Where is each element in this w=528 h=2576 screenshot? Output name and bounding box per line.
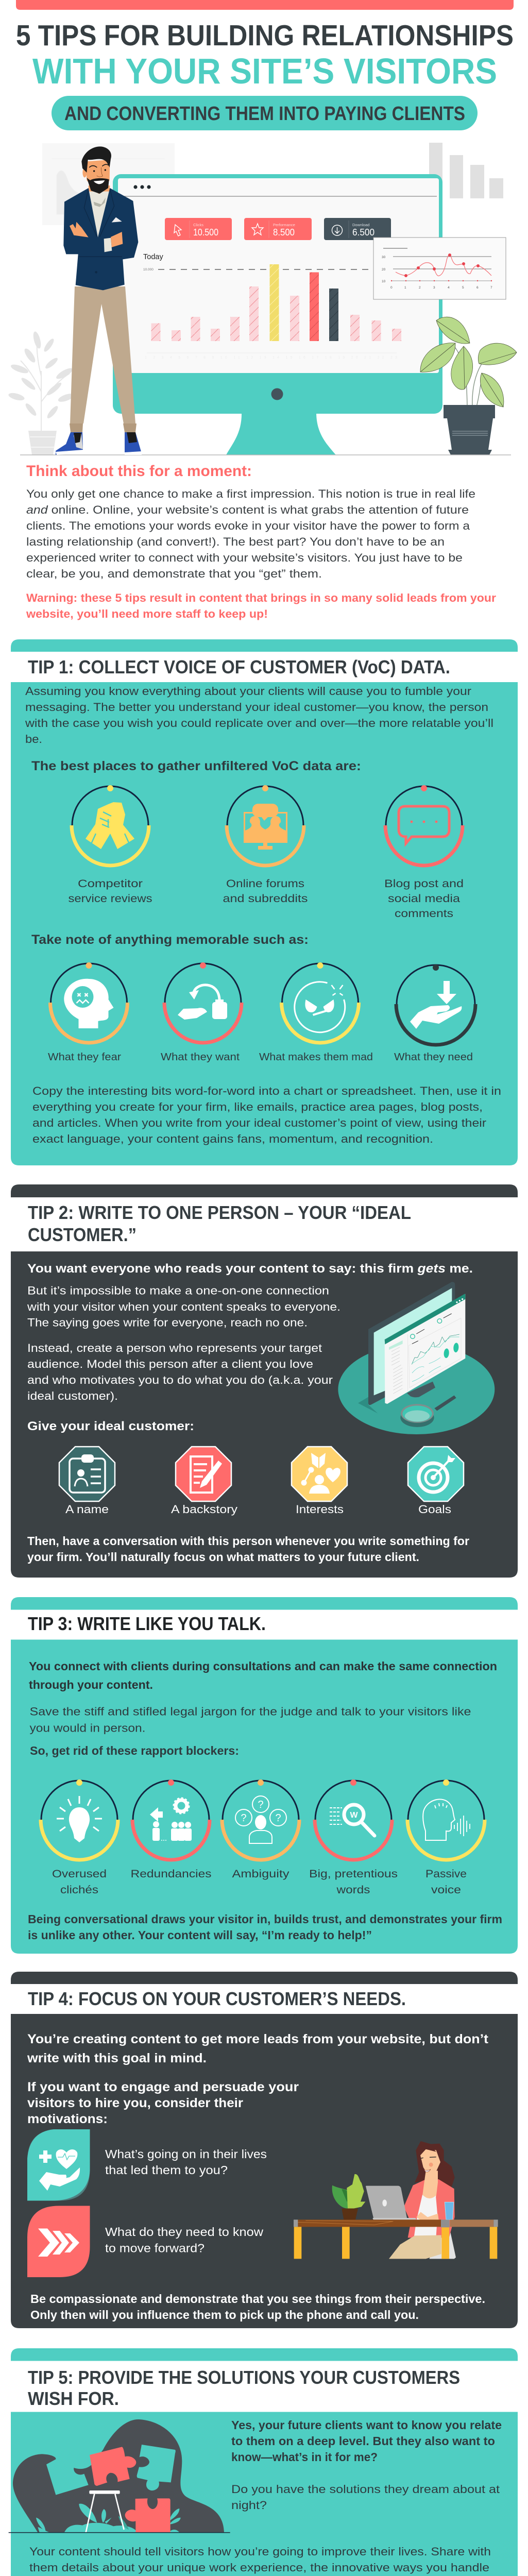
title line 2: WITH YOUR SITE’S VISITORS bbox=[32, 51, 497, 91]
subheading: give your ideal customer: Give your ideal customer: bbox=[27, 1419, 194, 1433]
panel: tip 4 bbox=[11, 1972, 518, 2328]
dark blob bbox=[13, 2419, 224, 2532]
intro paragraph: and online. Online, your website’s content is what grabs the attention of future bbox=[26, 503, 469, 516]
tip 3 top band bbox=[11, 1597, 518, 1609]
tip 2 closing: Then, have a conversation with this person whenever you write something for bbox=[27, 1534, 469, 1548]
tip 5 lead bbox=[231, 2418, 502, 2464]
line chart card: 20 bbox=[382, 268, 386, 272]
tip 4 closing bbox=[30, 2292, 485, 2321]
line chart card: 10 bbox=[382, 280, 386, 283]
icon: big pretentious words bbox=[315, 1780, 392, 1860]
tip 1 closing text: and articles. When you write from your ideal customer’s point of view, using their bbox=[32, 1116, 486, 1129]
tip 3 closing bbox=[28, 1912, 502, 1942]
laptop bbox=[366, 2186, 407, 2218]
icon: online forums bbox=[227, 785, 304, 866]
stat card: performance: Performance bbox=[273, 223, 295, 227]
tip 5 lead: Yes, your future clients want to know you relate bbox=[231, 2418, 502, 2432]
line chart card: 2 bbox=[419, 286, 421, 290]
panel: tip 3 bbox=[11, 1597, 518, 1954]
line chart card: 30 bbox=[382, 256, 386, 259]
tip 5 paragraph: them details about your unique work experience, the innovative ways you handle bbox=[29, 2561, 489, 2574]
tip 1 heading: TIP 1: COLLECT VOICE OF CUSTOMER (VoC) DATA. bbox=[28, 656, 450, 677]
tip 1 closing text: Copy the interesting bits word-for-word into a chart or spreadsheet. Then, use it in bbox=[32, 1084, 501, 1097]
tip 5 lead: to them on a deep level. But they also want to bbox=[231, 2434, 495, 2448]
desk bbox=[298, 2219, 441, 2227]
labels: rapport blockers: clichés bbox=[60, 1884, 98, 1896]
tip 5 lead: know—what’s in it for me? bbox=[231, 2450, 378, 2464]
tip 2 closing: your firm. You’ll naturally focus on what matters to your future client. bbox=[27, 1550, 419, 1564]
tip 2 lead: You want everyone who reads your content to say: this firm gets me. bbox=[27, 1262, 473, 1276]
stat card: performance bbox=[244, 218, 312, 240]
tip 1 intro text: be. bbox=[25, 733, 42, 745]
subtitle pill: AND CONVERTING THEM INTO PAYING CLIENTS bbox=[64, 103, 465, 125]
warning: Warning: these 5 tips result in content that brings in so many solid leads from your bbox=[26, 591, 496, 604]
line chart card: 3 bbox=[433, 286, 435, 290]
neck bbox=[89, 185, 110, 208]
line chart card: 0 bbox=[390, 286, 393, 290]
line chart card: 4 bbox=[448, 286, 450, 290]
puzzle illustration bbox=[9, 2419, 230, 2533]
icon: what they want bbox=[164, 962, 242, 1043]
labels: places: and subreddits bbox=[223, 893, 308, 905]
stat card: performance: 8.500 bbox=[273, 227, 295, 238]
tip 2 paragraph two: audience. Model this person after a client you love bbox=[27, 1358, 313, 1370]
bar chart: today bbox=[143, 253, 401, 360]
ground line bbox=[20, 454, 511, 455]
badge: goals bbox=[408, 1447, 464, 1501]
tip 1 panel background bbox=[11, 682, 518, 1165]
tip 3 paragraph: you would in person. bbox=[30, 1722, 145, 1734]
gray plant bbox=[8, 331, 75, 455]
tip 5 question: night? bbox=[231, 2499, 267, 2512]
labels: rapport blockers: Passive bbox=[425, 1868, 467, 1880]
tip 1 intro text: with the case you wish you could replicate over and over—the more relatable you’ll bbox=[25, 717, 493, 730]
panel: tip 1 bbox=[11, 639, 518, 1165]
tip 4 sub-lead bbox=[27, 2080, 299, 2126]
tip 5 heading: WISH FOR. bbox=[28, 2388, 119, 2409]
badge: interests bbox=[292, 1447, 347, 1501]
tip 1 intro text bbox=[25, 685, 493, 745]
tip 4 heading: TIP 4: FOCUS ON YOUR CUSTOMER’S NEEDS. bbox=[28, 1988, 406, 2009]
background bars bbox=[429, 143, 503, 198]
tip 2 paragraph one bbox=[27, 1284, 340, 1329]
labels: rapport blockers: words bbox=[336, 1884, 370, 1896]
warning: website, you’ll need more staff to keep up! bbox=[26, 607, 268, 620]
tip 2 paragraph one: But it’s impossible to make a one-on-one connection bbox=[27, 1284, 329, 1297]
line chart card: 1 bbox=[404, 286, 406, 290]
icon: helping hand leaf bbox=[27, 2129, 90, 2201]
labels: memorable: What they fear bbox=[48, 1052, 121, 1063]
hands bbox=[416, 2212, 439, 2221]
icon: ambiguity bbox=[222, 1780, 299, 1860]
beard bbox=[87, 178, 109, 194]
text: what's going on: What’s going on in their lives bbox=[105, 2147, 267, 2161]
tip 5 heading bbox=[28, 2367, 460, 2409]
labels: rapport blockers: Big, pretentious bbox=[309, 1868, 398, 1880]
labels: memorable: What they want bbox=[161, 1052, 240, 1063]
tip 4 sub-lead: motivations: bbox=[27, 2112, 108, 2126]
potted plant bbox=[332, 2185, 349, 2209]
ground line bbox=[9, 2531, 230, 2534]
tip 4 lead: write with this goal in mind. bbox=[27, 2051, 207, 2065]
subheading: rapport blockers: So, get rid of these rapport blockers: bbox=[30, 1744, 239, 1757]
red puzzle piece bottom bbox=[125, 2498, 171, 2532]
stat card: download: Download bbox=[352, 223, 369, 227]
face bbox=[420, 2149, 440, 2174]
stat card: download bbox=[324, 218, 391, 240]
foliage bbox=[36, 2504, 181, 2532]
tip 3 closing: is unlike any other. Your content will say, “I’m ready to help!” bbox=[28, 1928, 372, 1942]
labels: rapport blockers bbox=[52, 1868, 467, 1896]
teal puzzle piece bbox=[137, 2445, 176, 2490]
tip 2 closing bbox=[27, 1534, 469, 1564]
icon: blog comments bbox=[385, 785, 463, 866]
monitor stand bbox=[226, 412, 336, 455]
labels: places bbox=[68, 878, 464, 920]
icon: big pretentious words: W bbox=[350, 1811, 358, 1820]
tip 1 intro text: Assuming you know everything about your clients will cause you to fumble your bbox=[25, 685, 471, 698]
tip 1 closing text: everything you create for your firm, like emails, practice area pages, blog posts, bbox=[32, 1100, 483, 1113]
tip 5 question: Do you have the solutions they dream about at bbox=[231, 2483, 500, 2496]
stat card: download: 6.500 bbox=[352, 227, 374, 238]
labels: memorable bbox=[48, 1052, 473, 1063]
subtitle pill bbox=[52, 96, 478, 130]
icon: competitor service reviews bbox=[72, 785, 149, 866]
tip 2 paragraph one: with your visitor when your content speaks to everyone. bbox=[27, 1300, 340, 1313]
text: what's going on bbox=[105, 2147, 267, 2177]
tip 2 heading: TIP 2: WRITE TO ONE PERSON – YOUR “IDEAL bbox=[28, 1202, 411, 1223]
badge: a name bbox=[59, 1447, 115, 1501]
badge labels: A backstory bbox=[171, 1503, 237, 1516]
hero illustration bbox=[8, 143, 517, 455]
labels: places: Competitor bbox=[78, 878, 143, 890]
tip 5 paragraph: Your content should tell visitors how you’re going to improve their lives. Share with bbox=[29, 2545, 491, 2558]
icon: what makes them mad bbox=[281, 962, 359, 1043]
tip 2 paragraph two bbox=[27, 1342, 333, 1402]
title bbox=[16, 19, 514, 91]
tip 1 closing text bbox=[32, 1084, 501, 1145]
tip 4 closing: Only then will you influence them to pick up the phone and call you. bbox=[30, 2308, 419, 2321]
subheading: take note: Take note of anything memorable such as: bbox=[31, 933, 309, 947]
labels: places: service reviews bbox=[68, 893, 152, 905]
icon: forward chevrons leaf bbox=[27, 2206, 90, 2277]
tip 4 sub-lead: If you want to engage and persuade your bbox=[27, 2080, 299, 2094]
labels: rapport blockers: Ambiguity bbox=[232, 1868, 289, 1880]
panel: tip 5 bbox=[9, 2348, 518, 2576]
tip 2 heading: CUSTOMER.” bbox=[28, 1224, 137, 1245]
icon: what they fear bbox=[50, 962, 128, 1043]
icon: overused cliches bbox=[41, 1780, 118, 1860]
text: what's going on: that led them to you? bbox=[105, 2163, 228, 2177]
intro paragraph: experienced writer to connect with your website’s visitors. You just have to be bbox=[26, 551, 463, 564]
labels: places: social media bbox=[388, 893, 460, 905]
top bbox=[414, 2195, 437, 2236]
intro paragraph: clients. The emotions your words evoke in your visitor have the power to form a bbox=[26, 519, 470, 532]
warning bbox=[26, 591, 496, 620]
trousers bbox=[70, 286, 135, 423]
monitor bbox=[113, 174, 442, 414]
labels: places: Blog post and bbox=[384, 878, 464, 890]
man in navy blazer bbox=[56, 146, 142, 455]
tip 5 panel background bbox=[11, 2412, 518, 2576]
blazer bbox=[63, 188, 138, 290]
line chart card: 5 bbox=[462, 286, 464, 290]
chair bbox=[429, 2226, 456, 2259]
intro paragraph: clear, be you, and demonstrate that you “get” them. bbox=[26, 567, 322, 580]
blazer bbox=[404, 2179, 455, 2238]
tip 2 paragraph two: and who motivates you to do what you do (a.k.a. your bbox=[27, 1374, 333, 1386]
intro paragraph bbox=[26, 487, 475, 580]
icon: redundancies bbox=[132, 1780, 210, 1860]
labels: places: Online forums bbox=[226, 878, 304, 890]
icon: ambiguity: ? bbox=[241, 1812, 247, 1824]
intro section bbox=[26, 463, 496, 620]
stat card: clicks: 10.500 bbox=[193, 227, 218, 238]
tip 4 lead bbox=[27, 2032, 489, 2065]
badge labels: Interests bbox=[296, 1503, 344, 1516]
face bbox=[86, 160, 110, 194]
green plant bbox=[420, 317, 517, 455]
icon: passive voice bbox=[407, 1780, 485, 1860]
tip 2 paragraph two: ideal customer). bbox=[27, 1389, 118, 1402]
badge: a backstory bbox=[176, 1447, 231, 1501]
hands and cuff bbox=[70, 222, 89, 238]
tip 5 heading: TIP 5: PROVIDE THE SOLUTIONS YOUR CUSTOMERS bbox=[28, 2367, 460, 2388]
text: what do they need: What do they need to know bbox=[105, 2225, 264, 2239]
panel: tip 2 bbox=[11, 1184, 518, 1578]
tip 3 lead bbox=[29, 1659, 497, 1691]
shirt bbox=[88, 192, 110, 241]
trousers bbox=[389, 2235, 441, 2259]
badge labels bbox=[65, 1503, 451, 1516]
icon: what they need bbox=[396, 964, 475, 1045]
subheading: best places: The best places to gather unfiltered VoC data are: bbox=[31, 759, 361, 773]
labels: rapport blockers: Overused bbox=[52, 1868, 107, 1880]
labels: memorable: What makes them mad bbox=[259, 1052, 373, 1063]
bar chart: today: 10.000 bbox=[143, 268, 154, 272]
background card bbox=[42, 143, 175, 225]
tip 4 panel background bbox=[11, 2014, 518, 2328]
socks and shoes bbox=[56, 423, 142, 455]
text: what do they need: to move forward? bbox=[105, 2241, 205, 2255]
badge labels: Goals bbox=[418, 1503, 451, 1516]
hair bbox=[81, 146, 111, 173]
labels: places: comments bbox=[395, 908, 453, 920]
water glass bbox=[445, 2202, 454, 2219]
isometric dashboard illustration bbox=[338, 1282, 495, 1434]
bar chart: today: 1 2 3 4 5 6 7 8 9 10 11 12 13 14 15 16 17 18 19 20 21 22 23 bbox=[145, 356, 397, 360]
intro paragraph: lasting relationship (and convert!). The best part? You don’t have to be an bbox=[26, 535, 445, 548]
line chart card: 6 bbox=[476, 286, 479, 290]
tip 2 top band bbox=[11, 1184, 518, 1197]
icon: ambiguity: ? bbox=[258, 1799, 264, 1810]
tip 4 closing: Be compassionate and demonstrate that you see things from their perspective. bbox=[30, 2292, 485, 2306]
tip 3 closing: Being conversational draws your visitor in, builds trust, and demonstrates your firm bbox=[28, 1912, 502, 1926]
badge labels: A name bbox=[65, 1503, 109, 1516]
tip 5 question bbox=[231, 2483, 500, 2512]
tip 3 lead: through your content. bbox=[29, 1678, 153, 1691]
labels: rapport blockers: voice bbox=[431, 1884, 461, 1896]
tip 3 heading: TIP 3: WRITE LIKE YOU TALK. bbox=[28, 1613, 266, 1634]
stat card: clicks bbox=[165, 218, 232, 240]
tip 3 paragraph: Save the stiff and stifled legal jargon for the judge and talk to your visitors like bbox=[30, 1705, 471, 1718]
tip 3 lead: You connect with clients during consultations and can make the same connection bbox=[29, 1659, 497, 1673]
intro paragraph: You only get one chance to make a first impression. This notion is true in real life bbox=[26, 487, 475, 500]
tip 3 panel background bbox=[11, 1639, 518, 1954]
tip 2 paragraph two: Instead, create a person who represents your target bbox=[27, 1342, 322, 1354]
tip 2 panel background bbox=[11, 1251, 518, 1578]
tip 5 top band bbox=[11, 2348, 518, 2361]
pocket square bbox=[112, 217, 122, 223]
intro heading: Think about this for a moment: bbox=[26, 463, 252, 480]
woman at desk illustration bbox=[294, 2141, 498, 2259]
line chart card bbox=[373, 238, 506, 299]
stat card: clicks: Clicks bbox=[193, 223, 203, 227]
red puzzle piece top bbox=[90, 2447, 136, 2486]
tip 4 lead: You’re creating content to get more leads from your website, but don’t bbox=[27, 2032, 489, 2046]
labels: rapport blockers: Redundancies bbox=[131, 1868, 211, 1880]
line chart card: 7 bbox=[490, 286, 492, 290]
tip 4 top band bbox=[11, 1972, 518, 1984]
stool bbox=[86, 2490, 124, 2532]
labels: memorable: What they need bbox=[394, 1052, 473, 1063]
tip 4 sub-lead: visitors to hire you, consider their bbox=[27, 2096, 243, 2110]
tip 2 paragraph one: The saying goes write for everyone, reach no one. bbox=[27, 1316, 308, 1329]
bar chart: today: Today bbox=[143, 253, 163, 261]
tip 5 paragraph bbox=[29, 2545, 491, 2576]
top accent bar bbox=[16, 0, 514, 10]
tip 1 closing text: exact language, your content gains fans, momentum, and recognition. bbox=[32, 1132, 433, 1145]
tip 1 top band bbox=[11, 639, 518, 652]
tip 1 intro text: messaging. The better you understand your ideal customer—you know, the person bbox=[25, 701, 488, 714]
hair back bbox=[415, 2141, 455, 2187]
icon: ambiguity: ? bbox=[275, 1812, 281, 1824]
neck and chest bbox=[422, 2171, 438, 2204]
text: what do they need bbox=[105, 2225, 264, 2255]
tip 2 heading bbox=[28, 1202, 411, 1245]
tip 3 paragraph bbox=[30, 1705, 471, 1734]
